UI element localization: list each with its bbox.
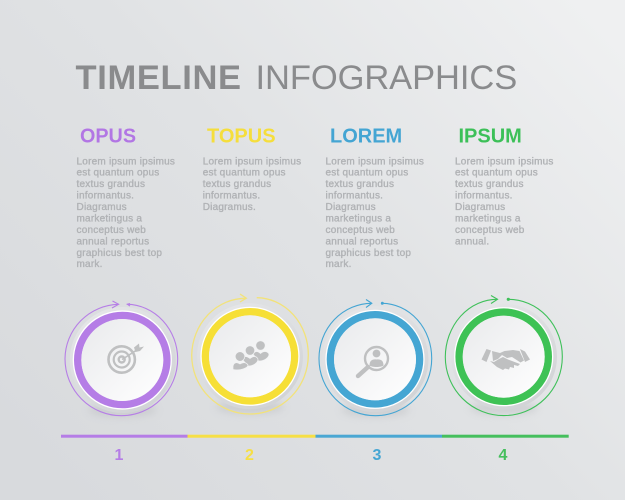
number 3: 3 <box>373 447 382 464</box>
body text: LOREM: mark. <box>326 259 352 270</box>
column 3 text: LOREM <box>326 126 424 270</box>
body text: OPUS: conceptus web <box>76 225 146 236</box>
heading: LOREM: LOREM <box>330 126 402 148</box>
number 4: 4 <box>499 447 508 464</box>
arrow ring 4 start dot <box>507 298 510 301</box>
body text: LOREM: marketingus a <box>326 214 391 224</box>
arrow ring 3 start dot <box>381 302 384 305</box>
body text: LOREM: annual reportus <box>326 236 398 247</box>
number 1: 1 <box>115 447 124 464</box>
body text: OPUS: graphicus best top <box>76 248 162 259</box>
icon: magnifier with person <box>358 347 388 376</box>
body text: OPUS: Diagramus <box>76 202 127 213</box>
arrow ring 4 <box>445 296 562 416</box>
body text: IPSUM: est quantum opus <box>455 168 538 179</box>
body text: TOPUS: Diagramus. <box>203 202 256 213</box>
body text: IPSUM: Lorem ipsum ipsimus <box>455 156 554 167</box>
step 2 circle <box>192 294 308 414</box>
body text: OPUS: informantus. <box>76 191 134 202</box>
body text: TOPUS: textus grandus <box>203 179 271 190</box>
heading: IPSUM: IPSUM <box>458 126 522 148</box>
icon: handshake <box>482 349 530 370</box>
step 4 circle <box>445 296 562 416</box>
body text: OPUS: annual reportus <box>76 236 149 247</box>
body text: OPUS: marketingus a <box>76 214 142 224</box>
heading: TOPUS: TOPUS <box>207 126 276 148</box>
body text: TOPUS: informantus. <box>203 191 260 202</box>
body text: OPUS: textus grandus <box>76 179 145 190</box>
heading: OPUS: OPUS <box>80 126 136 148</box>
body text: OPUS: est quantum opus <box>76 168 160 179</box>
body text: IPSUM: annual. <box>455 236 489 247</box>
body text: LOREM: conceptus web <box>326 225 395 236</box>
body text: LOREM: graphicus best top <box>326 248 411 259</box>
arrow ring 2 <box>192 294 308 414</box>
step 3 circle <box>319 300 432 417</box>
body text: OPUS: Lorem ipsum ipsimus <box>76 156 175 167</box>
body text: IPSUM: textus grandus <box>455 179 524 190</box>
step 1 circle <box>65 301 178 417</box>
timeline bar <box>61 435 569 438</box>
body text: IPSUM: Diagramus <box>455 202 505 213</box>
body text: LOREM: Diagramus <box>326 202 376 213</box>
arrow ring 3 <box>319 300 432 416</box>
body text: IPSUM: marketingus a <box>455 214 521 224</box>
column 1 text: OPUS <box>76 126 175 270</box>
column 2 text: TOPUS <box>203 126 301 213</box>
column 4 text: IPSUM <box>455 126 554 247</box>
body text: LOREM: est quantum opus <box>326 168 409 179</box>
body text: TOPUS: est quantum opus <box>203 168 286 179</box>
title: INFOGRAPHICS <box>256 59 517 97</box>
body text: LOREM: textus grandus <box>326 179 394 190</box>
icon: group of people <box>233 341 269 370</box>
body text: TOPUS: Lorem ipsum ipsimus <box>203 156 301 167</box>
body text: IPSUM: informantus. <box>455 191 513 202</box>
body text: LOREM: informantus. <box>326 191 383 202</box>
icon: target with arrow <box>108 344 144 373</box>
body text: IPSUM: conceptus web <box>455 225 525 236</box>
body text: LOREM: Lorem ipsum ipsimus <box>326 156 424 167</box>
body text: OPUS: mark. <box>76 259 103 270</box>
arrow ring 1 <box>65 301 178 416</box>
title: TIMELINE <box>76 59 242 97</box>
number 2: 2 <box>245 447 254 464</box>
